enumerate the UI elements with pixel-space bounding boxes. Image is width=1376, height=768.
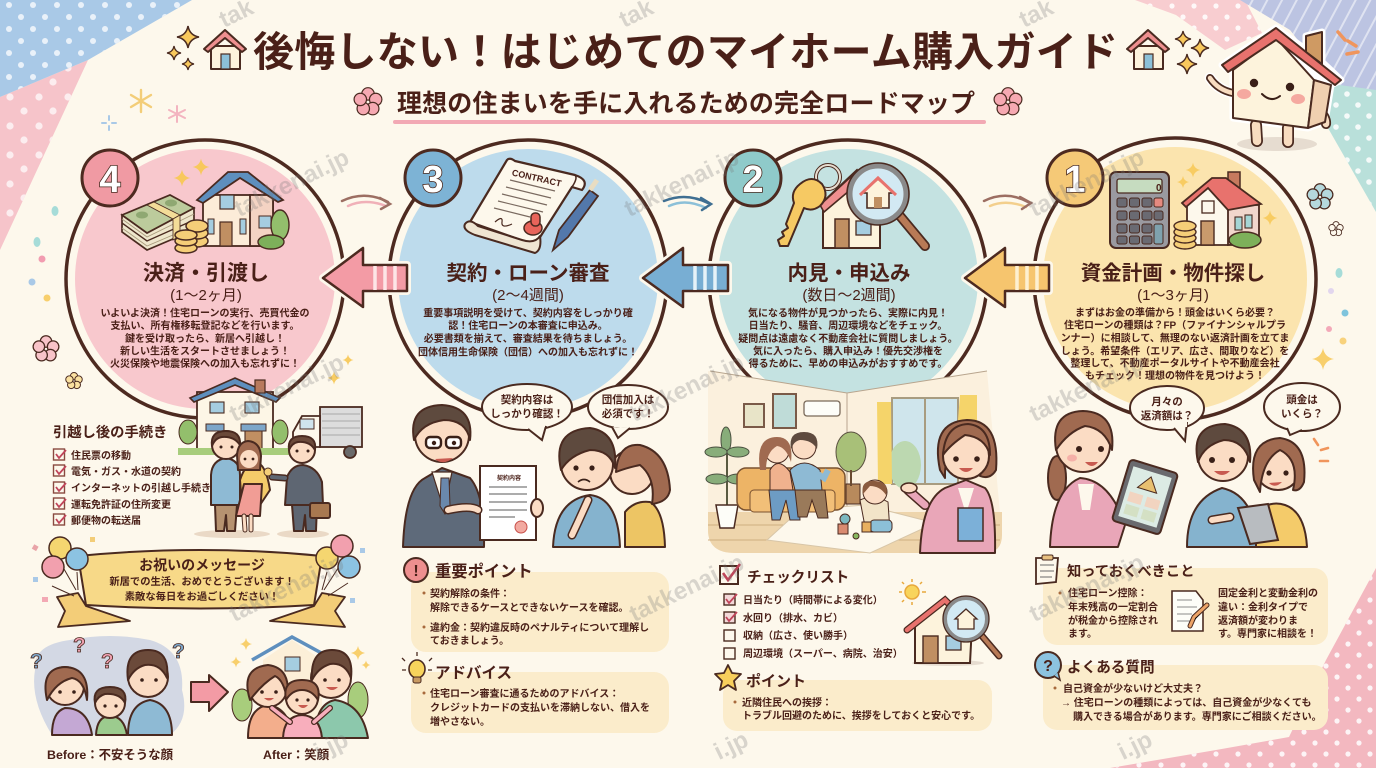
step 1 heading (1081, 262, 1265, 304)
step 3 text: 認！住宅ローンの本審査に申込み。 (448, 319, 608, 332)
panel: important points: 違約金：契約違反時のペナルティについて理解し (430, 621, 649, 634)
checklist: after moving procedures: 引越し後の手続き (53, 423, 167, 441)
watermarks: takkenai.jp (1025, 144, 1148, 223)
checklist: viewing (720, 564, 903, 660)
speech bubble: group insurance: 必須です！ (602, 407, 654, 420)
panel: what to know: が税金から控除され (1068, 614, 1158, 627)
illustration: calculator, coins and house (step 1) (1110, 162, 1278, 249)
checklist: viewing: 収納（広さ、使い勝手） (743, 629, 853, 642)
badge: number 3: 3 (422, 159, 444, 201)
step 2 text (738, 306, 958, 370)
panel: what to know: 固定金利と変動金利の (1218, 586, 1318, 600)
illustration: before family: ? (101, 650, 114, 673)
checklist: viewing: 周辺環境（スーパー、病院、治安） (743, 647, 903, 660)
panel: advice: アドバイス (435, 665, 512, 682)
watermarks: takkenai.jp (225, 349, 348, 428)
speech bubble: contract check: しっかり確認！ (490, 407, 564, 420)
step 3 heading: 契約・ローン審査 (447, 262, 609, 285)
icon: title left sparkles and house (167, 26, 246, 70)
panel: important points: ておきましょう。 (430, 635, 509, 647)
illustration: before family: ? (73, 634, 86, 657)
step 3 heading: (2〜4週間) (492, 287, 564, 304)
step 4 text: いよいよ決済！住宅ローンの実行、売買代金の (100, 306, 310, 320)
speech bubble: group insurance: 団信加入は (602, 393, 655, 406)
panel: what to know: 返済額が変わりま (1218, 614, 1298, 627)
checklist: viewing: 日当たり（時間帯による変化） (743, 594, 883, 606)
panel: important points: 解除できるケースとできないケースを確認。 (430, 601, 628, 614)
panel: advice (402, 652, 669, 733)
icon: title right house and sparkles (1127, 30, 1209, 74)
icon: house under magnifier and sun (899, 579, 999, 666)
panel: what to know: す。専門家に相談を！ (1218, 627, 1317, 640)
speech bubble: contract check: 契約内容は (501, 393, 554, 406)
panel: FAQ: → 住宅ローンの種類によっては、自己資金が少なくても (1061, 696, 1311, 709)
arrow: step 3 to step 4 (323, 248, 407, 307)
step 1 text: 住宅ローンの種類は？FP（ファイナンシャルプラ (1064, 318, 1286, 332)
icon: subtitle flowers (354, 88, 1022, 115)
badge: number 3 (405, 150, 461, 206)
illustration: agent with tablet and couple (1048, 411, 1307, 547)
title: 後悔しない！はじめてのマイホーム購入ガイド (253, 29, 1118, 75)
decorative orange accent lines (1314, 439, 1328, 461)
banner: congratulations message (32, 535, 365, 627)
checklist: after moving procedures: 住民票の移動 (71, 449, 131, 462)
panel: advice: クレジットカードの支払いを滞納しない、借入を (430, 701, 650, 714)
step 2 heading (788, 262, 910, 304)
panel: what to know: 違い：金利タイプで (1218, 600, 1308, 614)
panel: FAQ: 購入できる場合があります。専門家にご相談ください。 (1073, 710, 1322, 723)
arrow: small swoosh arrows (342, 196, 1031, 210)
panel: step 2 circle (709, 140, 987, 418)
step 4 heading: 決済・引渡し (143, 262, 269, 285)
speech bubble: monthly repayment (1130, 386, 1204, 441)
checklist: viewing: チェックリスト (747, 569, 849, 586)
watermarks: takkenai.jp (1025, 349, 1148, 428)
panel: what to know: 年末残高の一定割合 (1068, 600, 1158, 614)
step 2 text: 気に入ったら、購入申込み！優先交渉権を (753, 344, 943, 358)
illustration: money and house (step 4) (122, 158, 289, 253)
decorative confetti left (28, 90, 185, 389)
checklist: after moving procedures: 運転免許証の住所変更 (71, 498, 171, 511)
badge: number 1 (1047, 150, 1103, 206)
panel: important points: 重要ポイント (435, 563, 533, 581)
step 3 heading (447, 262, 609, 304)
illustration: before family: ? (172, 640, 185, 663)
step 2 heading: 内見・申込み (788, 262, 910, 285)
step 1 text (1061, 306, 1289, 382)
panel: FAQ: ? (1043, 658, 1053, 675)
checklist: after moving procedures: 郵便物の転送届 (71, 514, 141, 527)
watermarks: takkenai.jp (225, 549, 348, 628)
step 4 heading: (1〜2ヶ月) (170, 287, 242, 304)
illustration: calculator, coins and house (step 1): 0 (1156, 183, 1162, 194)
speech bubble: down payment (1264, 383, 1340, 435)
panel: what to know (1036, 555, 1328, 645)
caption: before: Before：不安そうな顔 (47, 747, 174, 762)
panel: important points: ! (413, 563, 419, 580)
badge: number 1: 1 (1064, 159, 1086, 201)
watermarks: takkenai.jp (620, 144, 743, 223)
panel: FAQ: よくある質問 (1067, 659, 1155, 676)
step 3 text: 団体信用生命保険（団信）への加入も忘れずに！ (418, 346, 638, 358)
illustration: before family (30, 634, 185, 735)
step 2 heading: (数日〜2週間) (802, 287, 896, 304)
step 3 text: 必要書類を揃えて、審査結果を待ちましょう。 (424, 332, 632, 345)
mascot: smiling house (1210, 28, 1358, 151)
speech bubble: contract check (482, 384, 572, 440)
illustration: agent explaining contract to couple: 契約内容 (497, 474, 521, 482)
step 1 text: しょう。希望条件（エリア、広さ、間取りなど）を (1061, 344, 1289, 358)
panel: what to know: 知っておくべきこと (1067, 563, 1195, 580)
banner: congratulations message: 新居での生活、おめでとうございます！ (109, 575, 295, 588)
step 3 text (418, 306, 638, 358)
panel: step 1 circle (1034, 138, 1316, 420)
panel: FAQ: 自己資金が少ないけど大丈夫？ (1063, 682, 1203, 695)
panel: important points: 契約解除の条件： (430, 587, 510, 600)
panel: advice: 増やさない。 (430, 715, 490, 728)
step 1 heading: (1〜3ヶ月) (1137, 287, 1209, 304)
speech bubble: group insurance (588, 385, 668, 438)
badge: number 2 (725, 150, 781, 206)
panel: advice: 住宅ローン審査に通るためのアドバイス： (430, 687, 619, 700)
watermarks: i.jp (710, 726, 753, 766)
step 1 text: 整理して、不動産ポータルサイトや不動産会社 (1070, 356, 1280, 370)
arrow: step 2 to step 3 (643, 248, 728, 307)
speech bubble: down payment: 頭金は (1286, 393, 1318, 406)
illustration: living room viewing (705, 371, 1002, 553)
step 2 text: 日当たり、騒音、周辺環境などをチェック。 (749, 319, 947, 332)
arrow: step 1 to step 2 (965, 248, 1049, 307)
step 4 text: 鍵を受け取ったら、新居へ引越し！ (125, 332, 285, 345)
banner: congratulations message: お祝いのメッセージ (139, 557, 265, 573)
illustration: new house, keys handover and truck (178, 354, 362, 538)
badge: number 4: 4 (99, 159, 121, 201)
step 2 text: 得るために、早めの申込みがおすすめです。 (749, 357, 947, 370)
badge: number 2: 2 (742, 159, 764, 201)
panel: what to know: ます。 (1068, 628, 1097, 640)
panel: point: 近隣住民への挨拶： (742, 696, 832, 709)
watermarks (215, 0, 1157, 766)
speech bubble: down payment: いくら？ (1281, 408, 1323, 420)
step 1 heading: 資金計画・物件探し (1081, 262, 1265, 285)
step 4 heading (143, 262, 269, 304)
step 4 text: 火災保険や地震保険への加入も忘れずに！ (110, 357, 300, 370)
watermarks: takkenai.jp (625, 549, 748, 628)
step 4 text (100, 306, 310, 370)
illustration: contract and pen (step 3): CONTRACT (511, 168, 563, 189)
speech bubble: monthly repayment: 返済額は？ (1141, 409, 1193, 422)
caption: after: After：笑顔 (263, 747, 330, 762)
step 2 text: 気になる物件が見つかったら、実際に内見！ (748, 306, 948, 320)
subtitle: 理想の住まいを手に入れるための完全ロードマップ (397, 90, 975, 118)
checklist: after moving procedures: インターネットの引越し手続き (71, 482, 211, 494)
checklist: after moving procedures (53, 423, 211, 527)
banner: congratulations message: 素敵な毎日をお過ごしください！ (125, 590, 279, 603)
illustration: contract and pen (step 3) (464, 159, 598, 253)
step 4 text: 新しい生活をスタートさせましょう！ (120, 344, 290, 358)
panel: what to know: 住宅ローン控除： (1068, 586, 1148, 600)
illustration: key and magnifier (step 2) (778, 163, 925, 248)
checklist: viewing: 水回り（排水、カビ） (743, 612, 843, 624)
step 1 text: ンナー）に相談して、無理のない返済計画を立てま (1061, 332, 1289, 344)
watermarks: takkenai.jp (625, 349, 748, 428)
step 4 text: 支払い、所有権移転登記などを行います。 (110, 319, 300, 332)
badge: number 4 (82, 150, 138, 206)
illustration: agent explaining contract to couple (403, 405, 670, 547)
checklist: after moving procedures: 電気・ガス・水道の契約 (71, 465, 181, 478)
step 2 text: 疑問点は遠慮なく不動産会社に質問しましょう。 (738, 332, 958, 345)
watermarks: takkenai.jp (1025, 549, 1148, 628)
panel: FAQ (1035, 652, 1328, 730)
panel: point: トラブル回避のために、挨拶をしておくと安心です。 (742, 709, 980, 722)
panel: point (715, 665, 992, 731)
panel: point: ポイント (746, 673, 806, 690)
panel: step 3 circle (389, 140, 667, 418)
speech bubble: monthly repayment: 月々の (1151, 396, 1183, 408)
arrow: before to after (191, 675, 228, 711)
panel: step 4 circle (66, 140, 344, 418)
illustration: after family (230, 637, 370, 738)
watermarks: i.jp (1114, 726, 1157, 766)
step 3 text: 重要事項説明を受けて、契約内容をしっかり確 (423, 306, 633, 320)
step 1 text: もチェック！理想の物件を見つけよう！ (1085, 369, 1265, 382)
decorative confetti right (1307, 184, 1348, 370)
step 1 text: まずはお金の準備から！頭金はいくら必要？ (1075, 306, 1275, 319)
panel: important points (404, 558, 669, 652)
icon: document and pencil (1172, 591, 1207, 631)
watermarks: takkenai.jp (230, 144, 353, 223)
illustration: before family: ? (30, 650, 43, 673)
watermarks: i.jp (310, 726, 353, 766)
